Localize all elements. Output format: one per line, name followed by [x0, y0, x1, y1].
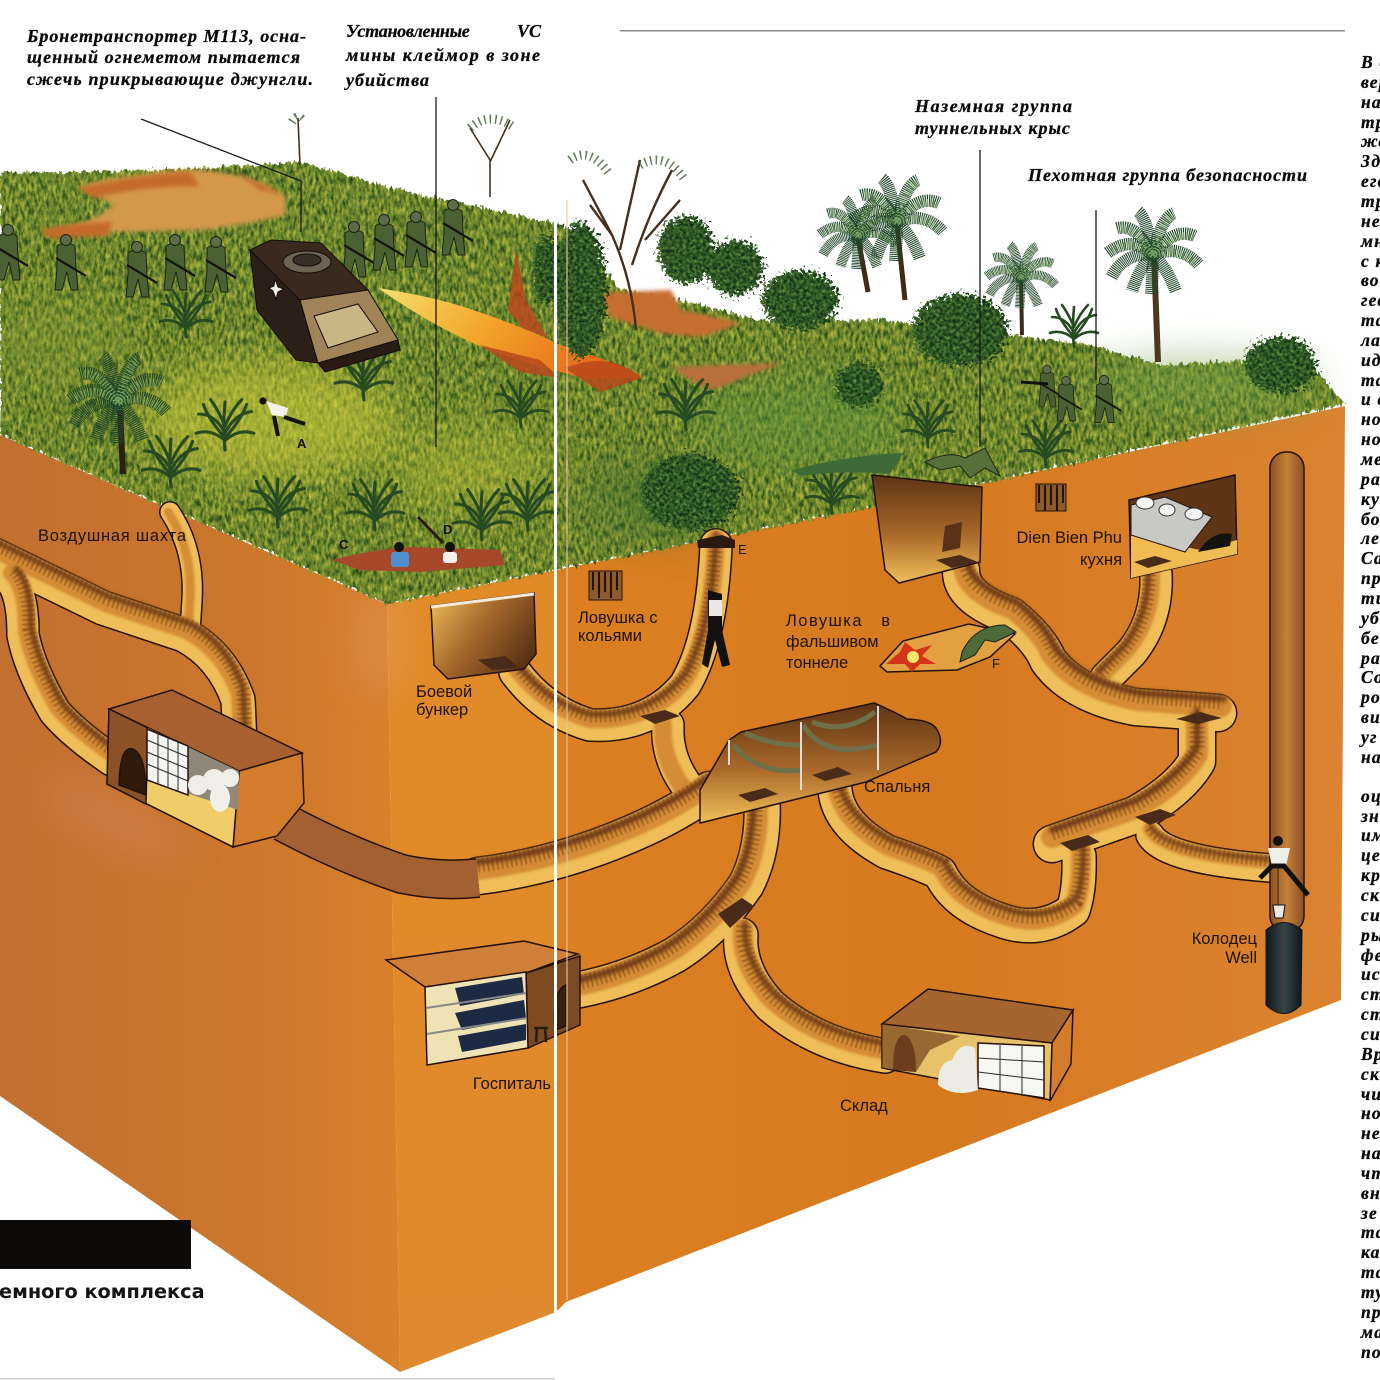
kitchen	[1129, 475, 1237, 578]
kitchen floor	[1131, 535, 1237, 578]
false tunnel with explosion trap	[880, 624, 1016, 672]
shaft E entrance box	[697, 535, 735, 668]
bottom rule	[0, 1378, 555, 1380]
clipped side column text: ск	[1361, 885, 1380, 905]
labels on the cutaway	[38, 527, 1258, 1115]
heading: claymore mines callout: убийства	[344, 70, 429, 90]
map letters: A	[297, 436, 307, 451]
heading: M113 callout: щенный огнеметом пытается	[27, 47, 300, 67]
coal heap	[1198, 533, 1232, 552]
well shaft	[1260, 452, 1308, 1014]
man climbing	[702, 590, 730, 668]
explosion core	[907, 651, 919, 663]
palm: small fore-left	[70, 356, 166, 474]
crates	[147, 729, 188, 795]
labels on the cutaway: Колодец	[1192, 930, 1258, 948]
water barrel	[1266, 922, 1302, 1014]
pots	[1136, 497, 1203, 520]
spike trap right	[1036, 484, 1066, 511]
hammocks	[733, 712, 877, 771]
clipped side column text: ле	[1360, 528, 1380, 548]
clipped side column text: ск	[1361, 1064, 1380, 1084]
palm: tall right	[1107, 211, 1199, 362]
bare tree foliage specks	[292, 117, 685, 180]
labels on the cutaway: Спальня	[864, 778, 930, 796]
trapdoor	[1134, 556, 1172, 568]
pit under tunnel rats	[872, 475, 982, 583]
tunnel mid tones	[0, 512, 1270, 1050]
bare trees	[298, 118, 680, 330]
labels on the cutaway: фальшивом	[786, 633, 879, 651]
map letters	[297, 436, 1000, 671]
soldier crawling	[960, 625, 1016, 662]
labels on the cutaway: Госпиталь	[473, 1075, 551, 1093]
map letters: C	[339, 537, 349, 552]
heading: claymore mines callout: Установленные	[346, 21, 470, 41]
posts	[729, 706, 878, 790]
map letters: E	[738, 542, 747, 557]
tunnel outlines	[0, 512, 1270, 1056]
leader lines	[141, 97, 1096, 447]
clipped side column text: ку	[1361, 489, 1380, 509]
plants on the left page	[142, 291, 557, 540]
stove block	[1131, 497, 1212, 552]
dirt patch: red earth	[40, 172, 285, 238]
labels on the cutaway: Ловушка в	[786, 612, 890, 630]
lower left caption block	[0, 1220, 205, 1303]
black heading bar	[0, 1220, 191, 1269]
page fold seam	[554, 0, 557, 1380]
tunnels network	[0, 512, 1270, 1056]
labels on the cutaway: Dien Bien Phu	[1016, 529, 1122, 547]
battle bunker	[431, 593, 536, 679]
jungle foliage masses	[532, 216, 1316, 530]
clipped side column text	[1359, 52, 1380, 1362]
tunnel rats group at the pit	[792, 448, 1000, 478]
floor trapdoors	[738, 788, 778, 802]
dirt clearing: right page lower	[671, 363, 782, 390]
sleeping quarters	[700, 703, 940, 823]
palm: medium	[986, 245, 1056, 335]
second fold line	[566, 200, 568, 1300]
explosion	[886, 642, 936, 672]
hospital room	[386, 941, 580, 1065]
labels on the cutaway: тоннеле	[786, 654, 848, 672]
clipped side column text: уг	[1359, 727, 1378, 747]
stool	[534, 1028, 548, 1042]
trapdoor	[478, 656, 520, 670]
M113 armoured carrier	[250, 240, 400, 372]
tunnel floors	[0, 512, 1270, 1056]
heading: M113 callout: сжечь прикрывающие джунгли.	[27, 69, 313, 89]
dirt clearing: far left	[43, 170, 285, 232]
clipped caption: емного комплекса	[0, 1280, 205, 1303]
store room	[882, 989, 1073, 1101]
map letters: D	[443, 522, 452, 537]
panel: left earth face	[0, 435, 400, 1372]
labels on the cutaway: бункер	[416, 701, 468, 719]
bunker roof plank	[431, 594, 534, 607]
sacks	[938, 1046, 978, 1093]
sacks	[188, 769, 239, 812]
pit trapdoor	[942, 522, 962, 552]
heading: infantry callout: Пехотная группа безопасности	[1027, 165, 1307, 185]
flamethrower jet	[378, 288, 642, 379]
figures in the trench	[391, 517, 457, 567]
tunnel hatch shading	[0, 536, 1270, 1047]
infantry line	[0, 200, 473, 297]
labels on the cutaway: кухня	[1080, 551, 1122, 569]
burning scrub on flame path	[480, 250, 642, 392]
heading: tunnel rats callout: Наземная группа	[914, 96, 1072, 116]
panel: right earth face	[556, 406, 1345, 1312]
labels on the cutaway: Воздушная шахта	[38, 527, 187, 545]
map letters: F	[992, 656, 1000, 671]
tunnel platform trapdoors	[640, 710, 1222, 928]
soft pale highlights on the left face	[33, 580, 405, 874]
viet cong runner A	[259, 397, 305, 436]
panel: jungle ground surface	[0, 162, 1345, 604]
clipped side column text: уб	[1359, 608, 1380, 628]
room: left storage with tunnel end	[107, 690, 304, 847]
colour blotches on the grass	[0, 290, 1320, 540]
labels on the cutaway: Боевой	[416, 683, 472, 701]
security squad	[1021, 365, 1121, 423]
back wall	[147, 728, 239, 810]
clipped side column text: бе	[1361, 628, 1380, 648]
heading: M113 callout: Бронетранспортер M113, осна-	[26, 26, 306, 46]
dirt clearing: right page upper	[600, 290, 741, 337]
well man and bucket	[1260, 836, 1308, 918]
labels on the cutaway: Склад	[840, 1097, 888, 1115]
labels on the cutaway: Ловушка с	[578, 609, 658, 627]
heading: claymore mines callout: мины клеймор в зоне	[345, 45, 540, 65]
crates	[978, 1043, 1044, 1098]
dirt trench at C and D	[332, 547, 505, 572]
covered brown tunnel	[283, 822, 478, 879]
heading: tunnel rats callout: туннельных крыс	[915, 118, 1070, 138]
tunnel dark ceilings	[0, 534, 1270, 1044]
labels on the cutaway: Well	[1225, 949, 1257, 967]
clipped side column text: зн	[1360, 806, 1380, 826]
clipped side column text: зе	[1360, 1203, 1378, 1223]
bunks	[455, 977, 526, 1052]
top rule	[620, 30, 1345, 32]
heading: claymore mines callout: VC	[517, 21, 542, 41]
plants on the right page	[657, 305, 1098, 513]
panel: centre earth face	[387, 570, 556, 1372]
spike trap left	[589, 571, 622, 600]
labels on the cutaway: кольями	[578, 627, 642, 645]
palm: tall pair	[820, 178, 943, 300]
grass texture area	[0, 162, 1345, 604]
